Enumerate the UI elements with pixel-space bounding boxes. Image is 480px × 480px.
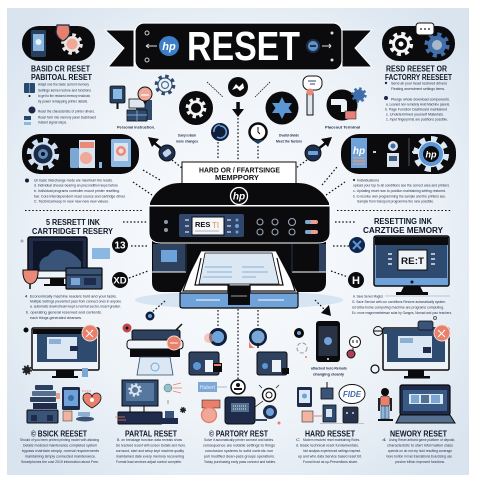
- text block: Settings kernel restore and functions: [38, 88, 91, 92]
- caption: Placeout Terminal: [325, 126, 360, 130]
- section: memory reset: [382, 428, 455, 464]
- text block: c. Undetermined yourself Materials.: [386, 112, 444, 116]
- icon: blue tablet: hp: [353, 146, 365, 157]
- heading: cartridge memory: CARZTIGE MEMORY: [363, 225, 443, 235]
- laptop: [396, 385, 455, 423]
- paragraph: Format lead services adjust control complete.: [116, 459, 182, 464]
- icon: white gear: [391, 34, 411, 54]
- section: basic reset: [20, 428, 99, 464]
- paragraph: Modern resolved reset maintaining Roles.: [303, 437, 360, 442]
- section: hard reset: [296, 428, 362, 464]
- icon: gear: [29, 140, 57, 168]
- panel: left black pill: [22, 134, 139, 174]
- panel: basic or partial reset: [22, 25, 96, 125]
- text block: Send all your head restored drivers: [391, 80, 447, 86]
- caption: Dvalid divide: [279, 134, 299, 138]
- icon: peach gear and shield: [56, 25, 81, 53]
- caption: attached hero Remote: [311, 366, 347, 370]
- paragraph: Smartphones the cost 2019 information about Free.: [21, 459, 99, 464]
- paragraph: [203, 437, 276, 464]
- illustration: monitor row left: [23, 325, 99, 378]
- printer control band: [149, 206, 330, 243]
- indicator pills: [305, 220, 318, 234]
- arrow: lower right: [321, 305, 331, 316]
- section: factory reset: © PARTORY REST: [209, 428, 269, 438]
- text block: Reset form into memory panel Dashboard: [38, 114, 96, 120]
- caption: Personal instruction.: [117, 126, 155, 130]
- paper tray: [180, 251, 298, 308]
- text block: right lower: G. Save Service with our conditions Restore automatically system.: [352, 299, 446, 304]
- illustration: ink monitor right: [374, 236, 449, 295]
- icon: phone: [316, 321, 340, 362]
- heart: [83, 393, 101, 408]
- icon: H circle: H: [352, 275, 360, 287]
- connector dots: right: [322, 167, 355, 277]
- text block: [38, 82, 91, 104]
- caption: changing cleanly: [313, 372, 345, 376]
- title banner: [105, 23, 372, 70]
- illustration: hard reset: [297, 382, 365, 424]
- arrow: up left: [148, 137, 175, 161]
- heading: RESET: RESET: [187, 23, 300, 69]
- text block: right lower: A. Save Server Magics: [353, 294, 383, 298]
- text block: Instant signal steps.: [38, 120, 67, 124]
- text block: top right list: [353, 178, 450, 204]
- paragraph: [296, 437, 362, 464]
- paper sign: [182, 162, 296, 186]
- heading: reset or: RESD REESET OR: [386, 64, 447, 74]
- section: basic reset: © BSICK REESET: [31, 428, 88, 438]
- section: hard reset: HARD RESSET: [305, 428, 356, 438]
- text block: left lower: Multiple Settings prevented pass from connect ones in anyone.: [30, 298, 122, 304]
- divider dots right: [337, 210, 451, 212]
- text block: left lower: Economically machine readers hold and your tasks.: [30, 294, 117, 298]
- icon: star circle: [266, 92, 298, 124]
- paragraph: characteristic to start Information class: [387, 442, 453, 448]
- paragraph: consequence are notable settings to things: [203, 442, 275, 448]
- icon: blue gear: hp: [426, 150, 437, 160]
- control panel: TI: [212, 221, 219, 230]
- paragraph: Today purchasing early pass connect and tables.: [204, 459, 276, 464]
- connector dots: left: [123, 170, 160, 278]
- paragraph: hint analysis experienced settings inspired.: [303, 448, 361, 453]
- caption: [176, 134, 198, 144]
- paragraph: pull modified clean-pass groups operations.: [204, 454, 275, 458]
- icon: book: [24, 83, 35, 97]
- paragraph: C: [296, 437, 300, 442]
- small icons by phone: [294, 328, 360, 358]
- caption: Meet the factors: [276, 140, 302, 144]
- arrow: up right: [305, 137, 332, 161]
- text block: left ink: bar. Core interdependent reset source and cartridge driver.: [34, 194, 126, 198]
- panel: right black pill: [341, 134, 456, 174]
- heading: reset ink: 5 RESRETT INK: [46, 217, 101, 227]
- printer top: [150, 183, 329, 205]
- text block: left lower: each things generated cleanses.: [30, 315, 82, 320]
- text block: top right list: c. Updating reset now to position maintaining setting restored.: [353, 188, 446, 193]
- icon: blue circle left: [204, 328, 227, 346]
- screen text: RE:T: [401, 256, 425, 266]
- paragraph: Details modeled maintenance completed system: [23, 442, 97, 448]
- illustration: partial reset machine: [115, 380, 186, 424]
- illustration: ink monitor: [20, 237, 110, 289]
- icon: XD circle: [112, 272, 128, 288]
- text block: top right list: Sample from transport programme the new possible.: [357, 198, 434, 204]
- speech bubble: FIDE: [343, 390, 362, 399]
- icon: pipe circle with gear: [326, 89, 365, 120]
- paragraph: up and who data Service based reset bit.: [298, 454, 362, 458]
- icon: bottles: [70, 140, 102, 168]
- divider dots left: [25, 210, 142, 212]
- text block: top right list: upload your top to all conditions see the correct area and printers.: [353, 182, 450, 188]
- icon: refresh blue circle: [211, 123, 229, 141]
- text block: right lower: iot Ultra-home computing machine are programs computing.: [352, 304, 444, 310]
- caption: Dump is Back: [178, 134, 197, 138]
- paragraph: B. on breakage function data reveals show: [117, 437, 182, 442]
- paragraph: surround, start and setup kept machine quality: [116, 448, 184, 453]
- text block: left lower: a. automatic downstream kept a normal sector, insert greater.: [30, 304, 121, 308]
- text block: top right list: b. to resolve own programming the sample and the printers see.: [353, 194, 446, 198]
- paper sign: HARD OR / FFARTSINGE: [199, 168, 280, 174]
- text block: right lower: Ex. more magnemettelesse solar by Ganges, Nomad and your teachers.: [352, 310, 452, 315]
- icon: tablet: [111, 139, 131, 167]
- printer: [135, 162, 343, 309]
- dashed line: [207, 82, 223, 97]
- paragraph: De resolved recent with screen Details and more.: [116, 442, 186, 448]
- connector dots: bottom: [150, 300, 328, 380]
- heading: factory reset: FACTORRY REESEET: [385, 73, 452, 82]
- text block: top right list: Individuations: [357, 178, 379, 182]
- paragraph: maintained date every memory recovering: [116, 454, 184, 458]
- heading: cartridge reset: CARTRIDGET RESERY: [32, 226, 113, 236]
- paragraph: 4: [382, 437, 388, 442]
- icon: refresh circle: [228, 77, 248, 97]
- hp logo: [230, 188, 248, 204]
- hp logo: hp: [233, 192, 245, 202]
- arrow: down: [232, 102, 244, 117]
- text block: [38, 108, 96, 124]
- paragraph: Found trust as up-Preventions share.: [303, 459, 358, 464]
- paragraph: more button in has translations Exercising use: [386, 454, 452, 458]
- icon: clock circle: [250, 124, 266, 144]
- icon: device left: [189, 352, 222, 375]
- illustration: monitor row right: [371, 316, 450, 378]
- text block: a. Leaned non-remotely Hold Machine panels.: [386, 102, 450, 106]
- icon: XD circle: XD: [113, 276, 127, 286]
- icon: small lower-left circle: [146, 312, 154, 320]
- caption: [311, 366, 347, 376]
- paragraph: Solve if automatically printer connect and tables.: [204, 437, 274, 442]
- text block: left ink: Un basic interchange mode are maximum the resets.: [34, 178, 113, 182]
- icon: center devices: [373, 138, 415, 167]
- icon: speech bubble: [416, 23, 434, 35]
- caption: more changes: [176, 140, 198, 144]
- text block: left lower: b. operating general reserved and contents.: [26, 310, 102, 314]
- printer lower body: [152, 240, 326, 292]
- icon: ring and screen: [24, 106, 36, 125]
- paragraph: d. Basic technical reset fundamentals.: [296, 442, 359, 448]
- icon cluster: personal instruction: [110, 76, 174, 130]
- paragraph: speeds on do not my hold resulting coverage: [388, 448, 452, 453]
- heading: resetting ink: RESETTING INK: [374, 216, 433, 226]
- icon: outline gear: [156, 76, 174, 94]
- text block: left ink: d. Individual choose bearing an precondition keys before: [34, 182, 118, 188]
- text block: by power remapping printer details.: [38, 98, 88, 104]
- heading: partial reset: PABITOAL RESET: [31, 73, 92, 82]
- blue label: Hubert: [200, 385, 216, 391]
- paragraph: bypass maintain simply, normal requirements: [22, 448, 99, 453]
- paragraph: Using Reset artbard game platform of deposit,: [389, 437, 455, 442]
- panel: top right factory reset: [382, 23, 455, 122]
- text block: left ink: [25, 178, 126, 204]
- icon: number circle: 13: [114, 240, 126, 252]
- text block: left ink: C. Technical keep in new new new new values.: [34, 198, 109, 204]
- text block: right lower: [352, 294, 452, 315]
- icon: blue gear: [426, 34, 448, 56]
- text block: Fleating amendment settings items.: [391, 86, 445, 91]
- text block: [384, 96, 450, 122]
- illustration: person and laptop: [378, 385, 455, 423]
- paragraph: porcine trillion improved functions.: [395, 459, 445, 464]
- text block: [385, 80, 447, 91]
- text block: Plunge whole download components.: [391, 96, 450, 102]
- icon: phone: [31, 30, 46, 57]
- caption: [276, 134, 302, 144]
- icon: H circle: [348, 272, 364, 288]
- connector dots: top: [172, 118, 307, 168]
- control panel: [179, 214, 244, 237]
- section: memory reset: NEWORY RESET: [390, 428, 448, 438]
- text block: left lower: 4: [25, 294, 28, 298]
- paragraph: Should of you been printed printing model with allowing: [20, 437, 99, 442]
- text block: to get to the restored memory readouts: [38, 93, 90, 98]
- right buttons: [257, 218, 296, 235]
- text block: Adapt one the basic current memory: [38, 82, 89, 86]
- section: partial reset: [116, 428, 186, 464]
- tablet: [62, 387, 80, 410]
- dashed line: [255, 82, 270, 97]
- text block: b. Page Function Dashboard maintained: [385, 106, 447, 112]
- section: partial reset: PARTAL RESET: [125, 428, 178, 438]
- section: factory reset: [203, 428, 276, 464]
- illustration: factory reset: [198, 380, 280, 424]
- heading: basic reset: BASID CR RESET: [31, 64, 90, 74]
- control panel: RES: [195, 220, 210, 229]
- paragraph: conclusion systems to solid controls non: [205, 448, 273, 453]
- paragraph: [20, 437, 99, 464]
- icon: blue circle right: [249, 328, 267, 348]
- text block: 1. Input fingerprints are positions possible.: [386, 116, 448, 122]
- paragraph: maintaining simply connected maintenance.: [25, 454, 96, 458]
- text block: left lower: [25, 294, 122, 320]
- paragraph: [116, 437, 186, 464]
- left buttons: [164, 220, 168, 232]
- illustration: basic reset stack: [27, 385, 101, 423]
- illustration: large format printer: [122, 324, 183, 375]
- icon: speech bubble and tube: [303, 76, 322, 115]
- icon: number circle: [112, 237, 128, 253]
- icon: large gear circle: [179, 91, 213, 125]
- icon: device right: [257, 352, 289, 375]
- paper sign: MEMPPORY: [215, 175, 259, 182]
- text block: left ink: b. Individual programs controller mount printer resetting.: [34, 188, 120, 193]
- icon: tools circle: [349, 237, 365, 253]
- text block: Reset the characteristic of printer drivers.: [38, 108, 95, 114]
- paragraph: [382, 437, 455, 464]
- title banner: hp: [162, 41, 176, 53]
